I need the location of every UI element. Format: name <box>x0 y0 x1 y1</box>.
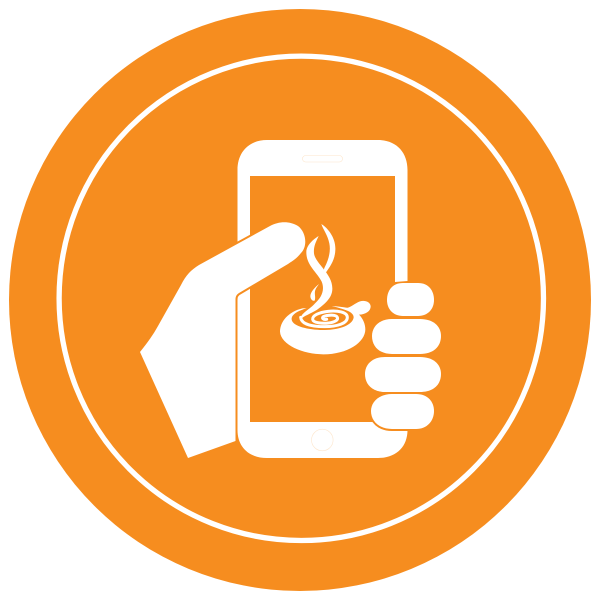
white rim right <box>332 306 359 315</box>
hand: four fingers <box>365 283 441 429</box>
finger 3 <box>365 357 441 392</box>
soup spiral <box>301 311 347 327</box>
finger 2 <box>372 319 441 354</box>
bowl interior <box>292 305 354 330</box>
steam strand long <box>301 236 332 319</box>
steam strand right <box>321 224 335 272</box>
icon: steaming bowl <box>280 224 371 354</box>
white inner ring <box>59 56 544 541</box>
hand: palm and index finger <box>140 222 305 458</box>
phone <box>238 140 408 458</box>
finger 4 <box>371 394 434 429</box>
finger 1 <box>387 283 434 316</box>
phone home button <box>312 429 333 451</box>
steam strand small <box>310 284 319 301</box>
bowl body and handle <box>280 301 371 354</box>
phone speaker <box>302 156 342 162</box>
